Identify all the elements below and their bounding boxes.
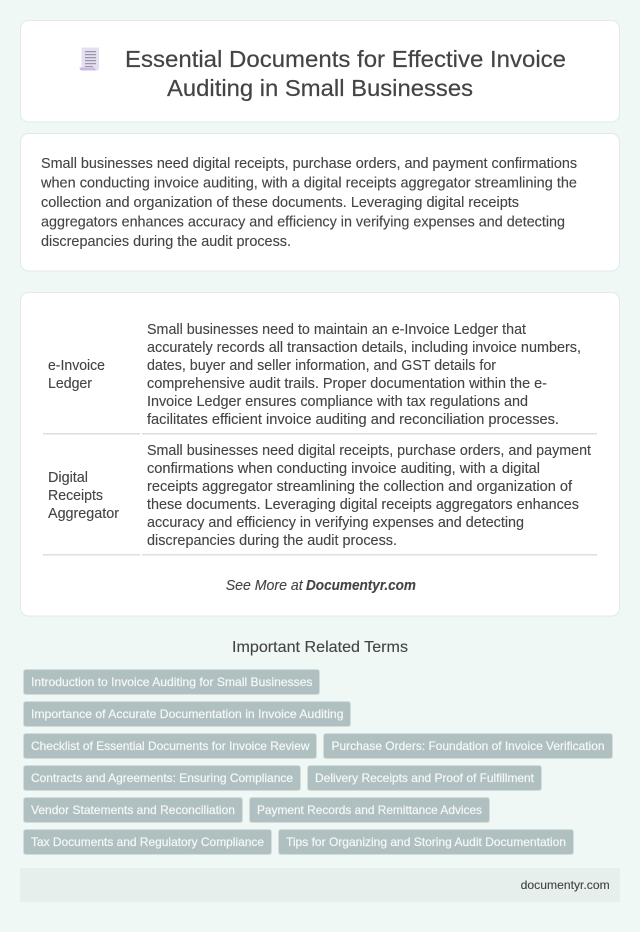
chip: purchase orders [324, 734, 612, 758]
row text: e-Invoice Ledger description: accurately records all transaction details, including invoice numbers, [147, 340, 581, 356]
icon: paper receipt [80, 48, 99, 70]
row text: Digital Receipts Aggregator description: confirmations when conducting invoice auditing, with a digital [147, 461, 540, 477]
title [125, 46, 566, 101]
row text: e-Invoice Ledger description [147, 322, 581, 428]
title: Essential Documents for Effective Invoice [125, 46, 566, 72]
row label: Digital Receipts Aggregator: Digital [48, 470, 88, 486]
row label: Digital Receipts Aggregator: Aggregator [48, 506, 119, 522]
chip: checklist: Checklist of Essential Documents for Invoice Review [31, 739, 310, 753]
chip: tax documents: Tax Documents and Regulatory Compliance [31, 835, 264, 849]
chip: importance [24, 702, 350, 726]
panel: terms table card [20, 292, 620, 616]
chip: purchase orders: Purchase Orders: Foundation of Invoice Verification [332, 739, 604, 753]
chip: contracts [24, 766, 300, 790]
table row: e-Invoice Ledger [43, 322, 597, 434]
chip: contracts: Contracts and Agreements: Ensuring Compliance [31, 771, 293, 785]
chip: tips [278, 830, 574, 854]
chip: introduction: Introduction to Invoice Auditing for Small Businesses [31, 675, 312, 689]
chip: importance: Importance of Accurate Documentation in Invoice Auditing [31, 707, 344, 721]
row text: e-Invoice Ledger description: facilitates efficient invoice auditing and reconciliation processes. [147, 412, 559, 428]
summary text: aggregators enhances accuracy and efficiency in verifying expenses and detecting [41, 214, 565, 230]
summary text: when conducting invoice auditing, with a digital receipts aggregator streamlining the [40, 176, 577, 192]
table row: Digital Receipts Aggregator [43, 443, 597, 556]
footer site name: documentyr.com [521, 878, 610, 892]
row text: Digital Receipts Aggregator description: these documents. Leveraging digital receipts aggregators enhances [147, 497, 579, 513]
panel: related term chips [24, 670, 612, 854]
chip: introduction [24, 670, 320, 694]
row text: e-Invoice Ledger description: comprehensive audit trails. Proper documentation within the e- [147, 376, 547, 392]
chip: delivery receipts [308, 766, 542, 790]
row label: e-Invoice Ledger [48, 358, 105, 392]
row label: Digital Receipts Aggregator: Receipts [48, 488, 103, 504]
panel: summary card [20, 134, 620, 271]
chip: checklist [24, 734, 316, 758]
row text: Digital Receipts Aggregator description: discrepancies during the audit process. [147, 533, 397, 549]
row text: e-Invoice Ledger description: Small businesses need to maintain an e-Invoice Ledger that [147, 322, 526, 338]
row label: Digital Receipts Aggregator [48, 470, 119, 522]
see more link [226, 578, 416, 594]
row label: e-Invoice Ledger: Ledger [48, 376, 92, 392]
see more link: Documentyr.com [306, 578, 416, 594]
row text: Digital Receipts Aggregator description: accuracy and efficiency in verifying expenses and detecting [147, 515, 524, 531]
summary text: Small businesses need digital receipts, purchase orders, and payment confirmations [41, 156, 577, 172]
row text: Digital Receipts Aggregator description [147, 443, 591, 549]
panel: title card [20, 20, 620, 122]
row text: e-Invoice Ledger description: dates, buyer and seller information, and GST details for [147, 358, 496, 374]
row label: e-Invoice Ledger: e-Invoice [48, 358, 105, 374]
summary text: discrepancies during the audit process. [41, 234, 291, 250]
row text: Digital Receipts Aggregator description: receipts aggregator streamlining the collection and organization of [147, 479, 573, 495]
row text: Digital Receipts Aggregator description: Small businesses need digital receipts, purchase orders, and payment [147, 443, 591, 459]
chip: payment records [250, 798, 490, 822]
title: Auditing in Small Businesses [167, 75, 473, 101]
footer bar [20, 868, 620, 902]
heading: important related terms: Important Related Terms [232, 639, 408, 656]
chip: payment records: Payment Records and Remittance Advices [257, 803, 482, 817]
see more link: See More at [226, 578, 304, 594]
chip: vendor statements: Vendor Statements and Reconciliation [31, 803, 235, 817]
summary text: collection and organization of these documents. Leveraging digital receipts [41, 195, 519, 211]
summary text [40, 156, 577, 250]
chip: vendor statements [24, 798, 242, 822]
chip: delivery receipts: Delivery Receipts and Proof of Fulfillment [315, 771, 535, 785]
chip: tax documents [24, 830, 272, 854]
row text: e-Invoice Ledger description: Invoice Ledger ensures compliance with tax regulations and [147, 394, 528, 410]
chip: tips: Tips for Organizing and Storing Audit Documentation [286, 835, 566, 849]
